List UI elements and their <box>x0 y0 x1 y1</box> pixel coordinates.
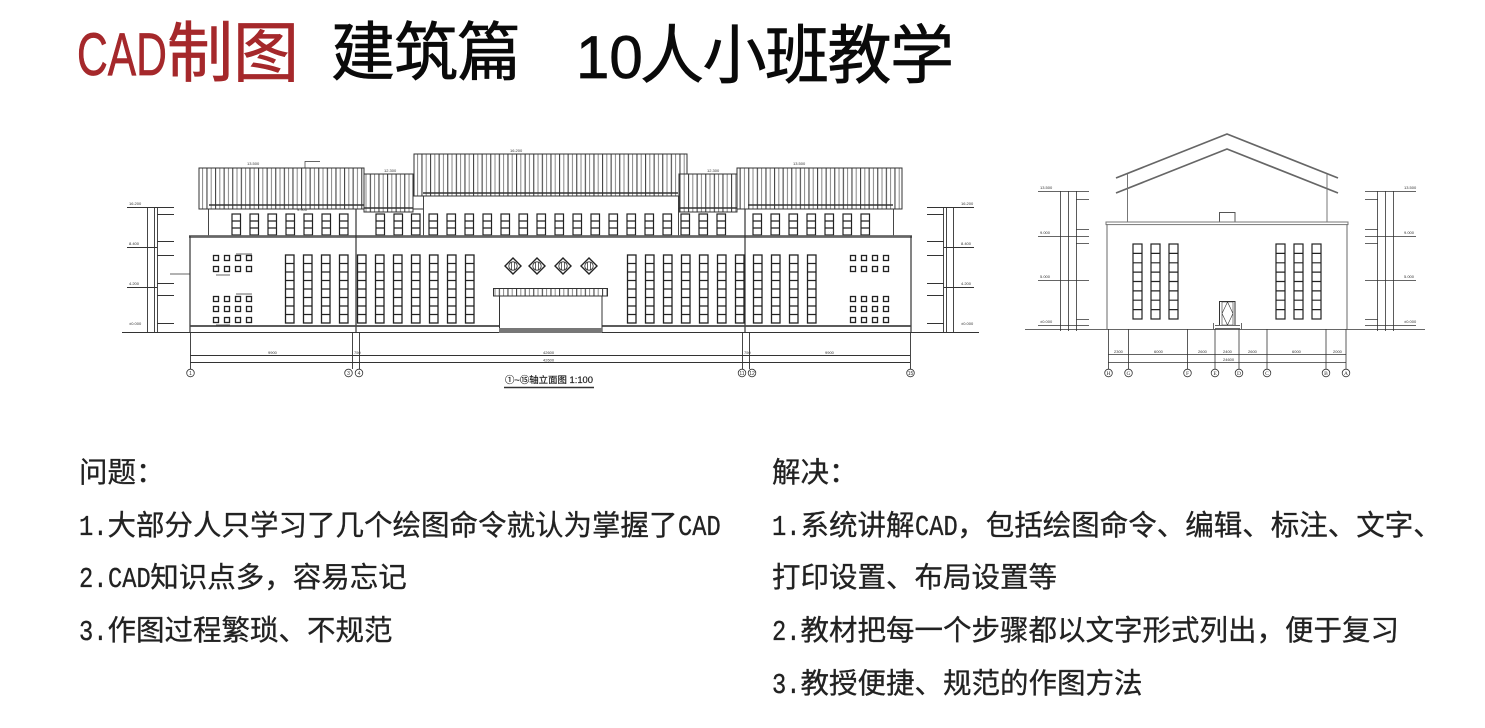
title: 建筑篇: 建筑篇 <box>331 17 520 89</box>
solution 3: 教授便捷、规范的作图方法 <box>800 668 1143 700</box>
solution 1 line 1: 1. <box>772 511 801 544</box>
dimension lines: 2600 <box>1248 349 1258 354</box>
upper windows <box>232 214 870 235</box>
solution 1 line 1: 系统讲解 ，包括绘图命令、编辑、标注、文字、 <box>800 510 1442 542</box>
windows <box>1133 244 1321 319</box>
ground line <box>122 332 979 334</box>
roof: left link <box>364 174 413 212</box>
dimension lines <box>190 332 910 369</box>
tall windows <box>286 255 816 323</box>
right level ladder: ±0.000 <box>961 321 974 326</box>
pitched roof <box>1116 134 1338 193</box>
main elevation drawing <box>122 148 979 388</box>
main wall outline and bay joints <box>190 209 911 332</box>
axis markers: F <box>1186 371 1189 377</box>
problem 2: 知识点多，容易忘记 <box>150 562 407 594</box>
parapet <box>1106 222 1348 225</box>
roof: left <box>199 168 364 209</box>
right level ladder: 13.500 <box>1404 185 1417 190</box>
axis markers: 3 <box>347 371 350 377</box>
right level ladder: 8.400 <box>961 241 972 246</box>
roof hatch <box>1220 212 1235 222</box>
dimension lines: 6000 <box>1292 349 1302 354</box>
dimension lines: 2600 <box>1198 349 1208 354</box>
axis markers: 1 <box>189 371 192 377</box>
title <box>77 16 952 92</box>
left level ladder: 5.000 <box>1040 274 1051 279</box>
entrance door <box>1214 302 1242 329</box>
small square windows left <box>214 254 252 325</box>
problem 3: 3. <box>79 616 108 649</box>
roof leader notes: 16.200 <box>510 148 523 153</box>
left level ladder <box>127 201 174 333</box>
solutions heading: 解决： <box>772 457 858 489</box>
axis markers: C <box>1265 371 1269 377</box>
problem 1: 大部分人只学习了几个绘图命令就认为掌握了 <box>108 510 678 542</box>
dimension lines: 2000 <box>1333 349 1343 354</box>
roof leader notes: 13.500 <box>793 161 806 166</box>
solution 2: 2. <box>772 616 801 649</box>
small square windows right <box>850 256 888 322</box>
right level ladder: ±0.000 <box>1404 319 1417 324</box>
right level ladder: 4.200 <box>961 281 972 286</box>
dimension lines: 42600 <box>543 350 555 355</box>
problem 1: 1. <box>79 511 108 544</box>
left level ladder: 13.500 <box>1040 185 1053 190</box>
roof posts <box>1128 174 1327 222</box>
axis markers: E <box>1213 371 1217 377</box>
problem 2: 2. <box>79 563 108 596</box>
axis markers: G <box>1127 371 1131 377</box>
upper storey wall <box>208 196 894 236</box>
left level ladder: ±0.000 <box>129 321 142 326</box>
title: 人小班教学: 人小班教学 <box>640 20 952 92</box>
problem 3: 作图过程繁琐、不规范 <box>108 615 393 647</box>
panel: solutions <box>772 457 1442 702</box>
plinth <box>190 325 911 327</box>
solution 1 line 1: CAD <box>915 511 957 544</box>
roof leader notes: 9.900 <box>297 207 308 212</box>
diamond windows <box>505 258 597 274</box>
left level ladder: 9.000 <box>1040 230 1051 235</box>
right level ladder <box>927 201 974 333</box>
problem 1: CAD <box>678 511 720 544</box>
title: red 制图: 制图 <box>167 16 299 90</box>
problems heading: 问题： <box>79 457 165 489</box>
axis markers: B <box>1324 371 1328 377</box>
roof: centre <box>414 154 687 196</box>
left level ladder: 8.400 <box>129 241 140 246</box>
left level ladder: ±0.000 <box>1040 319 1053 324</box>
solution 2: 教材把每一个步骤都以文字形式列出，便于复习 <box>800 615 1399 647</box>
axis markers <box>1105 369 1350 377</box>
dimension lines: 750 <box>354 350 361 355</box>
axis markers: 12 <box>749 371 755 377</box>
dimension lines: 24600 <box>1223 357 1235 362</box>
problem 2: CAD <box>108 563 150 596</box>
dimension lines: 42600 <box>543 358 555 362</box>
ground line <box>1025 328 1425 330</box>
parapet band <box>189 235 912 238</box>
axis markers <box>187 369 914 377</box>
dimension lines: 6000 <box>1154 349 1164 354</box>
roof: right <box>737 168 902 209</box>
title: 10: 10 <box>576 24 643 91</box>
axis markers: 11 <box>739 371 745 377</box>
dimension lines: 2300 <box>1114 349 1124 354</box>
drawing caption: ①~⑮轴立面图 1:100 <box>505 374 593 385</box>
dimension lines: 9900 <box>825 350 835 355</box>
roof leader notes <box>247 148 806 212</box>
right level ladder: 5.000 <box>1404 274 1415 279</box>
roof: right link <box>679 174 745 212</box>
dimension lines <box>1108 329 1346 369</box>
left level ladder <box>1038 185 1089 331</box>
left level ladder: 16.200 <box>129 201 142 206</box>
side elevation drawing <box>1025 134 1425 377</box>
title: red CAD: CAD <box>77 21 167 88</box>
dimension lines: 2400 <box>1223 349 1233 354</box>
axis markers: 4 <box>358 371 361 377</box>
roof leader notes: 13.500 <box>247 161 260 166</box>
left wall tick <box>170 273 190 275</box>
dimension lines: 9900 <box>268 350 278 355</box>
right level ladder <box>1365 185 1417 331</box>
right level ladder: 9.000 <box>1404 230 1415 235</box>
solution 3: 3. <box>772 669 801 702</box>
entrance canopy and steps <box>494 288 608 333</box>
dimension lines: 750 <box>744 350 751 355</box>
roof leader notes: 12.300 <box>707 168 720 173</box>
left level ladder: 4.200 <box>129 281 140 286</box>
solution 1 line 2: 打印设置、布局设置等 <box>772 562 1057 594</box>
axis markers: A <box>1344 371 1348 377</box>
axis markers: 15 <box>908 371 913 377</box>
axis markers: H <box>1107 371 1111 377</box>
walls <box>1107 224 1347 329</box>
roof leader notes: 12.300 <box>384 168 397 173</box>
axis markers: D <box>1237 371 1241 377</box>
right level ladder: 16.200 <box>961 201 974 206</box>
panel: problems <box>79 457 720 649</box>
